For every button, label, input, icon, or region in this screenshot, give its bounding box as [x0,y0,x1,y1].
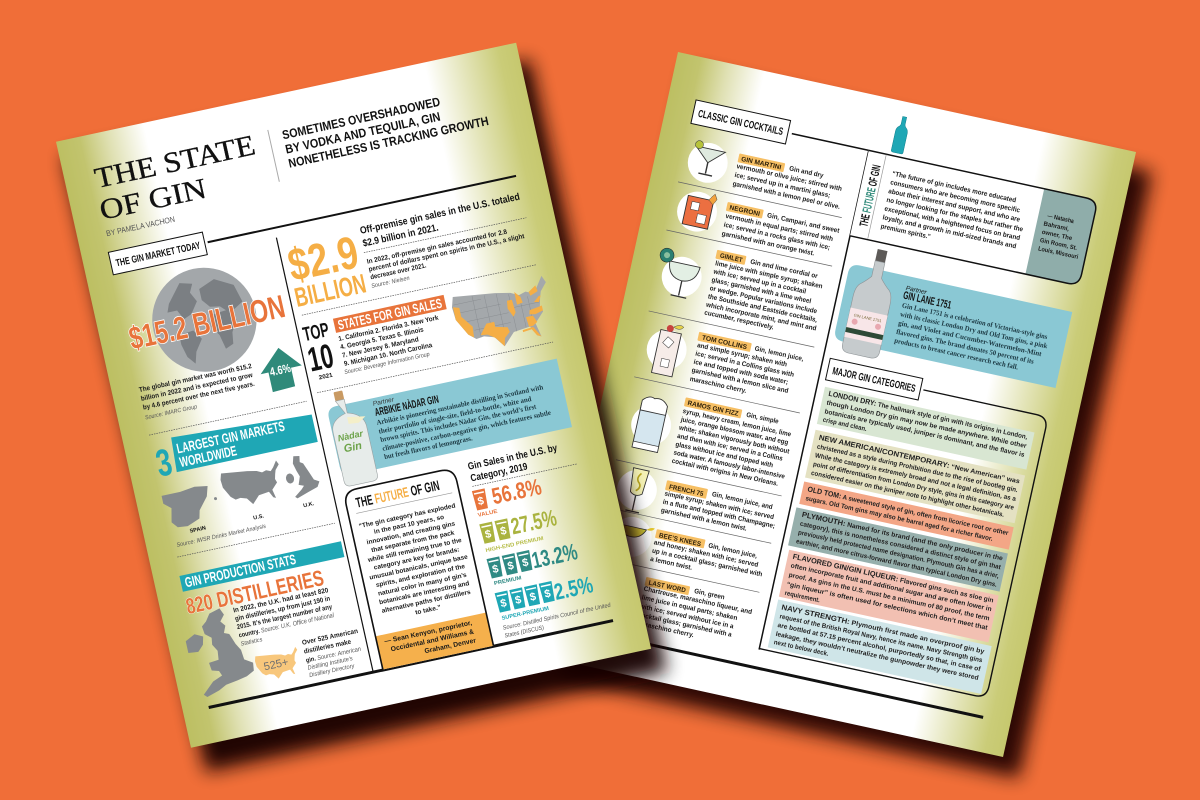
panel: partner gin lane 1751: flavored gins. The brand donates 50 percent of its [895,328,1035,366]
text: off-premise sales: $2.9 billion in 2021. [362,223,440,250]
chart: gin sales by category [465,439,614,640]
cocktail: gin martini: vermouth or olive juice; stirred with [736,163,843,193]
text: off-premise sales: decrease over 2021. [370,262,427,281]
banner: states for gin sales [333,295,447,333]
rotated heading: the future of gin: THE FUTURE OF GIN [856,163,884,228]
stat: top 10 2021: TOP [301,319,331,346]
attribution: Gin Room, St. [1039,237,1078,252]
map: 525+ american distilleries [254,647,302,683]
cocktail: gin martini [684,139,848,212]
source: discus: States (DISCUS) [504,625,545,640]
attribution [1037,212,1086,261]
heading: 3 largest gin markets worldwide: 3 [152,442,176,486]
cocktail: french 75: FRENCH 75 [668,484,704,498]
icon: rocks glass [673,187,721,235]
category: new american: While the category is extremely broad and not a legal definition, as a [814,452,1017,503]
cocktail: gin martini: garnished with a lemon peel or olive. [732,181,841,211]
banner: gin production stats: GIN PRODUCTION STATS [183,551,297,590]
row: high-end premium 27.5% [478,504,561,554]
attribution: owner, The [1041,229,1073,242]
text: uk distilleries: 2015. It’s the largest number of any [236,604,333,631]
cocktail: ramos gin fizz: syrup, heavy cream, lemon juice, lime [682,408,792,439]
cocktail: negroni: Gin, Campari, and sweet [766,212,841,235]
panel: future of gin quote [850,150,1098,286]
quote text: loyalty, and a growth in mid-sized brands and [882,214,1017,250]
stat: $2.9 billion [282,225,369,313]
cocktail: negroni: vermouth in equal parts; stirred with [725,213,834,243]
category: flavored gin [779,550,999,642]
label: the gin market today [108,232,207,275]
category: london dry: though London Dry gin may now be made anywhere. While other [826,400,1028,450]
cocktail: gimlet: with ice; served up in a cocktail [712,268,807,296]
category: flavored gin: “gin liqueur” is often used for selections which don’t meet that [786,581,989,632]
cocktail: ramos gin fizz: Gin, simple [746,412,779,426]
text: american distilleries: distilleries make [303,639,352,656]
cocktail: gimlet: or wedge. Popular variations include [709,285,818,315]
stat: $2.9 billion: $2.9 [283,226,363,291]
quote: while still remaining true to the [366,537,463,564]
category: new american: christened as a style during Prohibition due to the rise of bootleg gin. [816,443,1019,494]
cocktail: bee's knees: up in a cocktail glass; garnished with [651,548,763,578]
cocktail: gin martini: Gin and dry [788,165,824,180]
category: flavored gin: proof. As gins in the U.S. must be a minimum of 80 proof, the term [788,572,990,623]
quote text: premium spirits.” [880,223,931,241]
bottle: gin lane: GIN LANE 1751 [853,312,883,324]
cocktail: last word: LAST WORD [648,580,687,595]
row: value 56.8%: 56.8% [489,473,544,509]
row: high-end premium 27.5%: $ [499,525,508,538]
quote: category are key for brands: [373,546,460,572]
cocktail: gimlet: the Southside and Eastside cocktails, [707,293,818,324]
quote text [880,171,1030,260]
row: super-premium 2.5%: 2.5% [552,571,595,605]
quote: to take.” [415,604,442,616]
stat: top 10 2021: 10 [304,337,337,379]
map: u.k.: U.K. [303,501,315,509]
text: uk distilleries: gin distilleries, up from just 190 in [234,596,331,623]
text: uk distilleries: In 2022, the U.K. had at least 820 [233,587,329,614]
panel: partner gin lane 1751: products to breast cancer research each fall. [894,337,1019,372]
cocktail: gimlet: Gin and lime cordial or [750,259,819,280]
cocktail: gin martini: GIN MARTINI [740,156,782,172]
icon: teal bottle [891,116,911,154]
stat: 820 distilleries: 820 DISTILLERIES [184,565,326,619]
panel: partner arbikie nadar gin: Partner [372,396,395,408]
bottle: arbikie: Gin [343,440,363,455]
quote: natural color in many of gin’s [377,572,468,598]
panel: partner gin lane 1751 [831,244,1077,398]
category: plymouth: earthier, and more citrus-forward flavor than typical London Dry gins. [795,538,998,589]
category: navy strength: leakage, they wouldn’t neutralize the gunpowder they were stored [775,631,979,682]
chart heading [467,439,577,486]
cocktail: ramos gin fizz: glass without ice and topped with [675,441,774,469]
text: top ten states list: 4. Georgia 5. Texas 6. Illinois [340,326,425,351]
map: u.s.: U.S. [253,513,265,522]
cocktail: last word: Chartreuse, maraschino liqueur, and [643,586,753,616]
cocktail: negroni: ice; served in a rocks glass with ice; [723,222,831,252]
text: uk distilleries: Statistics [240,637,263,648]
attribution: Bahrami, [1043,220,1070,233]
text: global market: by 4.6 percent over the next five years. [142,381,256,412]
panel: the future of gin [343,468,493,670]
row: super-premium 2.5%: $ [529,591,537,604]
panel: partner arbikie nadar gin: ARBIKIE NÀDAR GIN [373,393,440,419]
quote: alternative paths for distillers [381,589,472,615]
heading: THE FUTURE OF GIN [354,477,441,511]
category: london dry [817,387,1035,470]
category: new american: point of differentiation from London Dry style, gins in this category are [812,461,1015,512]
cocktail: ramos gin fizz: juice, orange blossom water, and egg [679,416,789,447]
row: premium 13.2%: $ [506,560,515,573]
category: new american: NEW AMERICAN/CONTEMPORARY: “New American” was [818,433,1021,485]
cocktail: last word [635,577,755,650]
quote: innovation, and creating gins [366,520,456,546]
source: discus: Source: Distilled Spirits Council of the United [502,603,612,632]
right page [545,52,1136,757]
row: value 56.8%: $ [477,495,485,508]
cocktail: ramos gin fizz: and then with ice; served in a Collins [677,433,783,463]
text: uk distilleries: country. Source: U.K. Office of National [238,612,335,639]
chart heading: Category, 2019 [470,461,529,484]
cocktail: bee's knees: BEE’S KNEES [658,532,702,548]
byline: BY PAMELA VACHON [105,215,176,238]
cocktail: tom collins: TOM COLLINS [701,335,748,351]
category: navy strength: are bottled at 57.15 percent alcohol, purportedly so that, in case of [777,622,982,673]
cocktail: last word: lime juice in equal parts; shaken [641,594,738,622]
map: top states [449,275,558,355]
cocktail: ramos gin fizz: white; shaken vigorously both without [677,424,791,456]
category: old tom: sugars. Old Tom gins may also be barrel aged for a richer flavor. [805,495,994,543]
text: top ten states list: Source: Beverage Information Group [344,352,431,376]
panel: partner gin lane 1751: Gin Lane 1751 is a celebration of Victorian-style gins [901,302,1048,341]
stat: $2.9 billion: BILLION [292,268,369,313]
text: off-premise sales [358,191,535,290]
cocktail: tom collins: and simple syrup; shaken with [696,342,788,369]
category: new american [805,430,1025,523]
attribution: Occidental and Williams & [390,629,475,653]
cocktail: negroni: garnished with an orange twist. [721,230,815,258]
row: high-end premium 27.5%: 27.5% [508,504,559,539]
stat: top 10 2021: 2021 [318,373,334,381]
text: american distilleries: gin. Source: American [305,646,362,664]
category: flavored gin: requirement. [784,590,821,604]
panel: partner arbikie nadar gin: brown spirits. This includes Nàdar Gin, the world’s first [380,403,538,444]
quote text: “The future of gin includes more educated [891,171,1017,204]
row: premium 13.2% [486,538,581,587]
title: THE STATE [92,129,258,195]
cocktail: french 75: in a flute and topped with Champagne; [662,499,776,530]
row: value 56.8% [471,473,545,519]
cocktail: last word: cocktail glass; garnished with a [637,611,733,639]
cocktail: last word: maraschino cherry. [635,620,695,639]
quote: botanicals are interesting and [379,580,470,606]
category: plymouth: PLYMOUTH: Named for its brand (and the only producer in the [801,510,1004,563]
text: top ten states list: 1. California 2. Florida 3. New York [338,315,439,343]
cocktail: negroni [673,187,842,262]
cocktail: gin martini: ice; served up in a martini glass; [734,172,831,200]
row: super-premium 2.5%: $ [514,594,523,607]
row: premium 13.2%: 13.2% [529,538,580,573]
cocktail: tom collins: Gin, lemon juice, [754,346,804,363]
text: global market [138,363,259,421]
label: the gin market today: THE GIN MARKET TODAY [115,240,202,269]
globe with $15.2 billion: $15.2 BILLION [126,288,288,356]
row: super-premium 2.5%: $ [543,588,552,601]
subtitle: BY VODKA AND TEQUILA, GIN [284,110,442,157]
row: super-premium 2.5%: SUPER-PREMIUM [501,606,550,622]
cocktail: french 75: simple syrup; shaken with ice; served [664,490,774,521]
cocktail: bee's knees: a lemon twist. [649,556,693,572]
panel: partner gin lane 1751: gin, and Violet and Cucumber-Watermelon-Mint [897,319,1043,358]
stat: top 10 2021 [300,319,339,383]
panel: partner arbikie nadar gin: climate-positive, carbon-negative gin, which features subtle [382,409,552,453]
heading: 3 largest gin markets worldwide: LARGEST GIN MARKETS [175,418,286,456]
map: spain: SPAIN [189,525,207,535]
category: plymouth: category), this is nonetheless considered a distinct style of gin that [799,521,1002,571]
panel: partner arbikie nadar gin [324,345,574,487]
text: off-premise sales: Source: Nielsen [371,276,411,290]
label: classic gin cocktails [691,100,791,144]
globe with $15.2 billion [118,252,295,387]
attribution: Louis, Missouri [1037,245,1079,261]
text: off-premise sales: percent of dollars spent on spirits in the U.S., a slight [368,233,526,273]
cocktail: tom collins: garnished with a lemon slice and [691,367,789,395]
cocktail: gimlet: GIMLET [719,253,743,264]
row: high-end premium 27.5%: HIGH-END PREMIUM [485,536,545,554]
text: global market: The global gin market was worth $15.2 [138,363,253,394]
panel: partner gin lane 1751: Partner [905,285,928,297]
label: major gin categories: MAJOR GIN CATEGORIES [831,366,916,395]
quote text: no longer looking for the staples but rather the [886,197,1024,234]
category: flavored gin: often incorporate fruit and additional sugar and are often lower in [790,563,992,613]
row: value 56.8%: VALUE [477,509,498,519]
panel: partner gin lane 1751: with its classic London Dry and Old Tom gins, a pink [899,310,1048,350]
source: iwsr: Source: IWSR Drinks Market Analysis [176,524,267,549]
category: london dry: crisp and clean. [822,417,868,433]
category: london dry: botanicals are typically used, juniper is dominant, and the flavor is [824,408,1025,459]
text: uk distilleries [233,587,337,648]
cocktail: tom collins: ice; served in a Collins glass with [695,350,795,379]
text: american distilleries: Distilling Institute’s [307,656,353,672]
map: u.k. [282,452,325,512]
row: super-premium 2.5%: $ [499,597,508,610]
arrow: 4.6% growth [256,344,306,394]
category: flavored gin: FLAVORED GIN/GIN LIQUEUR: Flavored gins such as sloe gin [792,552,995,604]
panel: partner arbikie nadar gin: their portfolio of single-site, field-to-bottle, white and [378,395,532,436]
attribution [384,620,477,663]
cocktail: ramos gin fizz: cocktail with origins in New Orleans. [671,458,779,488]
quote: spirits, and exploration of the [375,563,466,589]
quote text: about their interest and support, and who are [888,188,1021,224]
cocktail: negroni: NEGRONI [729,205,761,218]
category: plymouth: previously held protected name designation. Plymouth Gin has a drier, [797,529,1000,580]
row: premium 13.2%: PREMIUM [493,575,523,587]
icon: champagne flute [613,465,661,516]
cocktail: tom collins: maraschino cherry. [689,376,747,395]
row: super-premium 2.5% [494,571,596,622]
bottle: arbikie [325,387,380,487]
category: london dry: LONDON DRY: The hallmark style of gin with its origins in London, [828,389,1029,441]
quote text: exceptional, with a heightened focus on brand [884,206,1021,242]
map: u.s. [219,460,290,527]
cocktail: bee's knees: and honey; shaken with ice; served [653,539,759,569]
category: old tom: OLD TOM: A sweetened style of gin, often from licorice root or other [807,484,1010,537]
arrow: 4.6% growth: 4.6% [268,361,292,379]
panel: partner arbikie nadar gin: but fresh flavors of lemongrass. [383,434,473,461]
cocktail: tom collins [641,319,805,405]
text: top ten states list: 9. Michigan 10. North Carolina [343,342,433,368]
category: plymouth [788,507,1008,592]
bottle: arbikie: Nàdar [337,428,364,443]
title [90,129,265,227]
text: off-premise sales: Off-premise gin sales in the U.S. totaled [359,192,521,237]
label: classic gin cocktails: CLASSIC GIN COCKTAILS [697,109,784,138]
left page [56,43,651,748]
cocktail: french 75: Gin, lemon juice, and [711,491,773,511]
cocktail: bee's knees [608,513,768,587]
map: spain [161,483,224,539]
chart heading: Gin Sales in the U.S. by [467,443,559,473]
panel: partner arbikie nadar gin: Arbikie is pioneering sustainable distilling in Scotland with [376,383,544,427]
cocktail: french 75 [613,465,781,542]
text: american distilleries [301,628,366,679]
quote: unusual botanicals, unique base [369,554,469,582]
subtitle [281,86,490,171]
text: off-premise sales: In 2022, off-premise gin sales accounted for 2.8 [366,229,508,266]
banner: states for gin sales: STATES FOR GIN SALES [336,296,443,333]
icon: fizz glass [626,394,677,454]
quote: in the past 10 years, so [373,514,445,536]
text: global market: Source: IMARC Group [145,404,198,421]
panel: partner gin lane 1751: GIN LANE 1751 [902,290,952,312]
category: navy strength: request of the British Royal Navy, hence its name. Navy Strength gins [779,613,983,664]
cocktail: gimlet: cucumber, respectively. [704,309,774,331]
map: u.k. large [180,604,258,699]
cocktail: last word: Gin, green [693,588,725,601]
category: new american: considered easier on the juniper note to highlight other botanicals. [810,470,1005,519]
quote: that separate from the pack [371,529,456,554]
heading: 3 largest gin markets worldwide: WORLDWIDE [178,442,238,470]
cocktail: tom collins: ice and topped with soda water; [693,359,789,386]
map: 525+ american distilleries: 525+ [263,656,290,673]
cocktail: ramos gin fizz: RAMOS GIN FIZZ [687,400,739,418]
cocktail: ramos gin fizz: soda water. A famously labor-intensive [673,450,786,481]
quote [357,502,478,624]
subtitle: NONETHELESS IS TRACKING GROWTH [287,114,490,171]
heading: 3 largest gin markets worldwide [152,408,320,486]
cocktail: ramos gin fizz [624,387,797,489]
row: premium 13.2%: $ [521,557,530,570]
row: high-end premium 27.5%: $ [484,528,493,541]
subtitle: SOMETIMES OVERSHADOWED [281,95,442,142]
cocktail: gimlet: glass; garnished with a lime wheel [711,277,812,305]
icon: cocktail glass with lemon [608,513,656,561]
text: top ten states list: 7. New Jersey 8. Maryland [342,336,419,360]
cocktail: gimlet: which incorporate mint, and mint and [704,301,817,333]
title: OF GIN [97,173,209,227]
icon: martini glass [684,139,732,187]
attribution: — Sean Kenyon, proprietor, [384,620,473,645]
category: navy strength [768,600,992,694]
bottle: gin lane [841,246,901,360]
category: navy strength: NAVY STRENGTH: Plymouth first made an overproof gin by [781,603,986,656]
attribution: Graham, Denver [424,637,477,655]
cocktail: last word: with ice; served without ice in a [638,603,734,631]
label: major gin categories [826,358,923,400]
attribution: — Natasha [1047,213,1075,225]
row: premium 13.2%: $ [491,563,500,576]
text: american distilleries: Distillery Directory [309,663,356,679]
text: global market: billion in 2022 and is expected to grow [140,372,254,403]
cocktail: french 75: garnished with a lemon twist. [660,507,748,533]
cocktail: gimlet [649,238,828,340]
text: top ten states list [336,315,447,376]
quote: “The gin category has exploded [358,503,456,530]
quote text: consumers who are becoming more specific [890,179,1021,214]
icon: coupe glass [652,247,707,301]
cocktail: bee's knees: Gin, lemon juice, [708,542,758,560]
category: navy strength: next to below deck. [773,639,829,658]
cocktail: gimlet: lime juice with simple syrup; shaken [714,260,823,290]
icon: collins glass [642,319,692,379]
text: american distilleries: Over 525 American [301,628,359,647]
